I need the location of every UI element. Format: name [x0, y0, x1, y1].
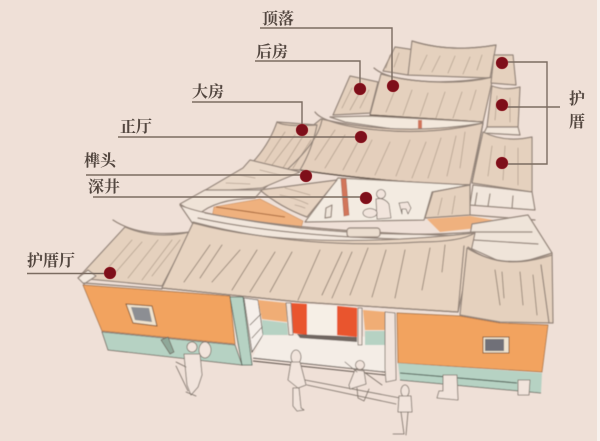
panel: left front roof (护厝厅): [78, 220, 190, 289]
illustration: ancestral house: [78, 41, 553, 435]
stele: [437, 375, 458, 400]
step lines: [253, 358, 385, 375]
marker dots: [104, 57, 508, 279]
panel: left big room roof (大房): [247, 120, 322, 190]
teal pillar: [230, 297, 252, 365]
window: [483, 337, 509, 353]
callout line: 顶落: [260, 28, 392, 86]
panel: front ridge bands: [180, 205, 475, 245]
panel: main hall roof (正厅): [260, 112, 483, 185]
label: 大房: 大房: [192, 82, 224, 101]
panel: tenon wing roof (榫头): [180, 160, 337, 228]
panel: left wall: [83, 285, 252, 365]
panel: entrance: [244, 298, 400, 404]
figure: dancing child: [345, 360, 382, 401]
panel: left rear roof (后房): [333, 76, 378, 115]
panel: right wing roof: [425, 185, 515, 232]
callout line: 正厅: [118, 136, 361, 138]
label: 护厝: 厝: [569, 112, 585, 131]
figure: porter: [161, 337, 211, 396]
callout line: 榫头: [86, 174, 306, 176]
panel: second roof: [370, 68, 493, 122]
label: 护厝厅: 护厝厅: [27, 251, 75, 270]
columns: [286, 303, 293, 335]
stone block: [518, 380, 530, 395]
dog: [399, 202, 411, 214]
callout bracket: 护厝: [502, 62, 560, 164]
orange inner wall: [212, 199, 303, 228]
seated figure: [363, 190, 391, 219]
label: 护厝: [569, 89, 585, 131]
panel: back top roof (顶落): [383, 41, 496, 78]
panel: right wall: [397, 313, 548, 400]
panel: right courtyard bands: [468, 215, 552, 266]
panel: gallery between roofs: [330, 116, 483, 130]
callout line: 大房: [192, 102, 302, 130]
red pillar: [341, 179, 349, 216]
label: 深井: 深井: [88, 178, 120, 196]
label: 榫头: 榫头: [84, 151, 118, 170]
callout line: 深井: [93, 196, 366, 198]
panel: front central roof: [162, 222, 475, 312]
panel: courtyard (深井): [305, 178, 470, 222]
label: 护厝: 护: [569, 89, 585, 108]
label: 后房: 后房: [256, 42, 288, 61]
label: 正厅: 正厅: [120, 118, 152, 136]
door curtain: [290, 303, 357, 342]
window: [126, 304, 157, 326]
figure: walking man: [393, 385, 412, 435]
label: 顶落: 顶落: [262, 9, 294, 28]
panel: right side roofs (护厝): [470, 55, 535, 220]
callout line: 后房: [255, 61, 360, 89]
callout line: 护厝厅: [27, 272, 110, 274]
panel: right front roof: [460, 247, 553, 323]
figure: standing woman: [288, 350, 306, 411]
